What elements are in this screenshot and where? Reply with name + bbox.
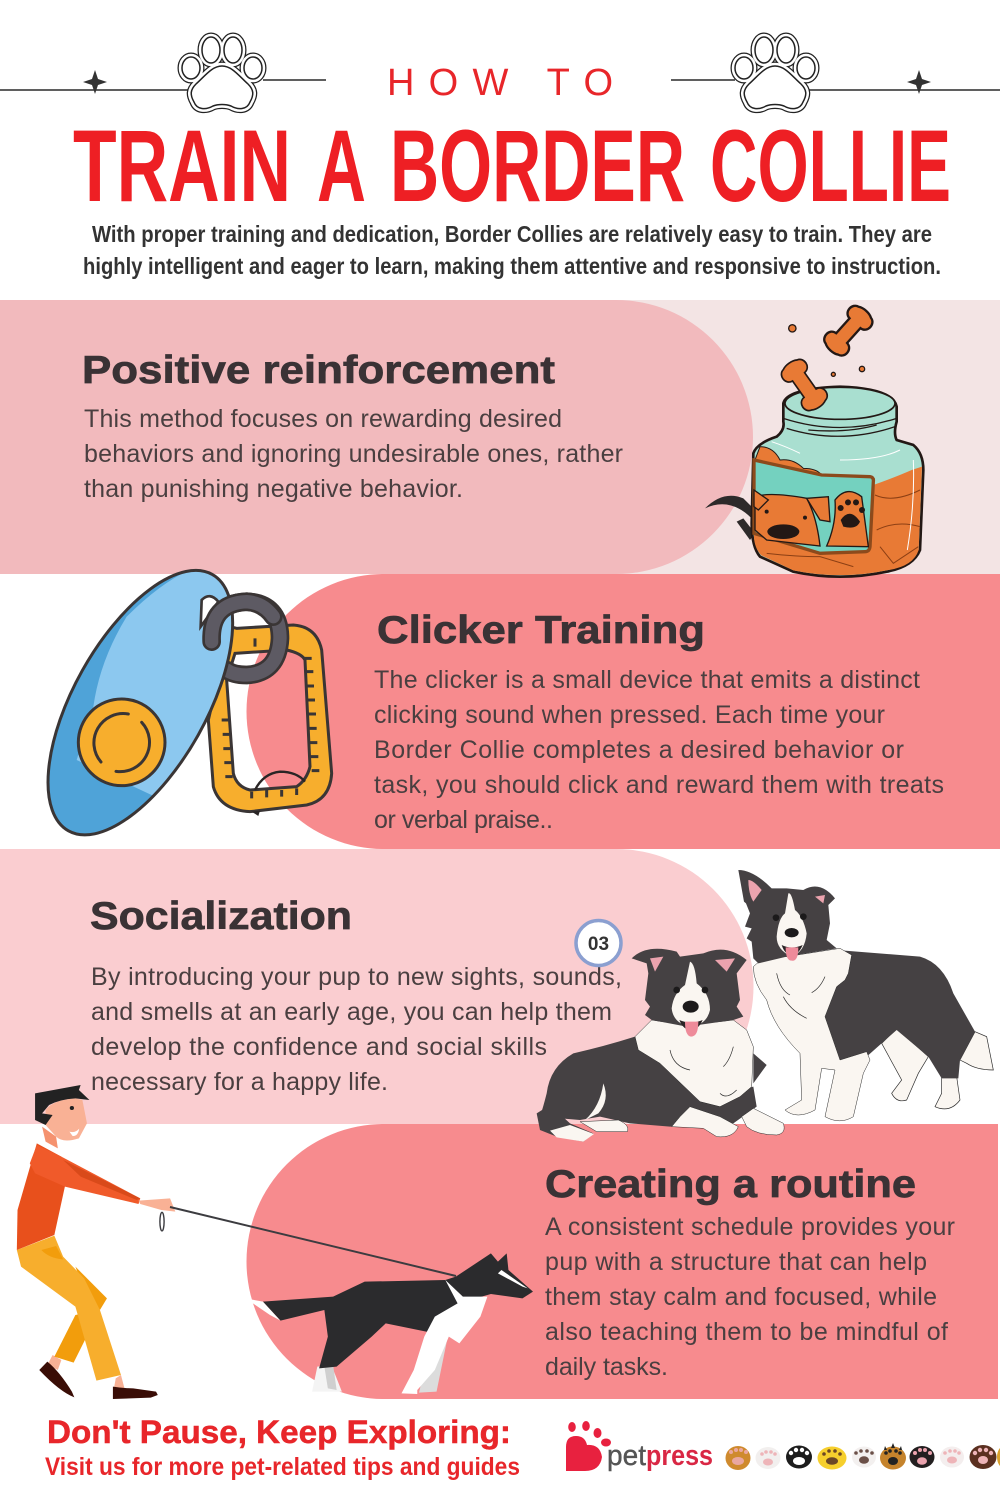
icon: clicker <box>46 568 334 836</box>
panel: clicker training <box>0 574 1000 849</box>
main title: TRAIN <box>73 109 291 223</box>
body: creating a routine: pup with a structure that can help <box>545 1248 927 1276</box>
logo: petpress: pet <box>607 1440 646 1472</box>
heading: clicker training: Clicker Training <box>377 609 705 652</box>
body: creating a routine: A consistent schedule provides your <box>545 1213 955 1241</box>
body: positive reinforcement: than punishing negative behavior. <box>84 475 463 503</box>
illustration: man holding leash <box>17 1085 175 1399</box>
panel: positive reinforcement <box>0 300 1000 574</box>
body: clicker training: or verbal praise.. <box>374 806 553 834</box>
number badge 03 <box>576 920 621 966</box>
body: socialization <box>91 963 622 1096</box>
header decoration: right line, star and paw <box>671 37 1000 109</box>
illustration: standing border collie <box>738 870 993 1121</box>
body: creating a routine: daily tasks. <box>545 1353 668 1381</box>
illustration: lying border collie <box>537 949 784 1142</box>
icon: treat jar <box>705 302 923 577</box>
logo: petpress <box>566 1421 713 1472</box>
body: positive reinforcement <box>84 405 623 503</box>
body: clicker training: The clicker is a small device that emits a distinct <box>374 666 920 694</box>
body: clicker training: Border Collie completes a desired behavior or <box>374 736 904 764</box>
paw print row <box>726 1443 1000 1470</box>
body: clicker training: task, you should click and reward them with treats <box>374 771 944 799</box>
number badge 03: 03 <box>588 934 609 955</box>
body: creating a routine: them stay calm and focused, while <box>545 1283 937 1311</box>
footer call to action: Don't Pause, Keep Exploring: <box>47 1414 511 1450</box>
body: clicker training: clicking sound when pressed. Each time your <box>374 701 885 729</box>
body: positive reinforcement: behaviors and ignoring undesirable ones, rather <box>84 440 623 468</box>
body: clicker training <box>374 666 944 834</box>
body: socialization: and smells at an early age, you can help them <box>91 998 612 1026</box>
heading: creating a routine: Creating a routine <box>545 1163 916 1206</box>
body: socialization: develop the confidence and social skills <box>91 1033 547 1061</box>
illustration: border collie on leash <box>245 1253 533 1394</box>
footer call to action <box>45 1414 520 1481</box>
body: socialization: necessary for a happy life. <box>91 1068 388 1096</box>
body: positive reinforcement: This method focuses on rewarding desired <box>84 405 562 433</box>
panel: socialization <box>0 849 1000 1124</box>
intro text <box>83 221 941 279</box>
heading: positive reinforcement: Positive reinforcement <box>82 349 555 392</box>
main title: A <box>317 109 366 223</box>
header decoration: left line, star and paw <box>0 37 326 109</box>
body: socialization: By introducing your pup to new sights, sounds, <box>91 963 622 991</box>
body: creating a routine <box>545 1213 955 1381</box>
heading: socialization: Socialization <box>90 895 352 938</box>
panel: creating a routine <box>0 1124 1000 1399</box>
footer call to action: Visit us for more pet-related tips and guides <box>45 1453 520 1481</box>
leash <box>170 1207 456 1276</box>
body: creating a routine: also teaching them to be mindful of <box>545 1318 948 1346</box>
logo: petpress: press <box>646 1440 713 1472</box>
main title: BORDER <box>390 109 685 223</box>
title kicker: HOW TO <box>387 62 613 104</box>
main title <box>73 109 951 223</box>
